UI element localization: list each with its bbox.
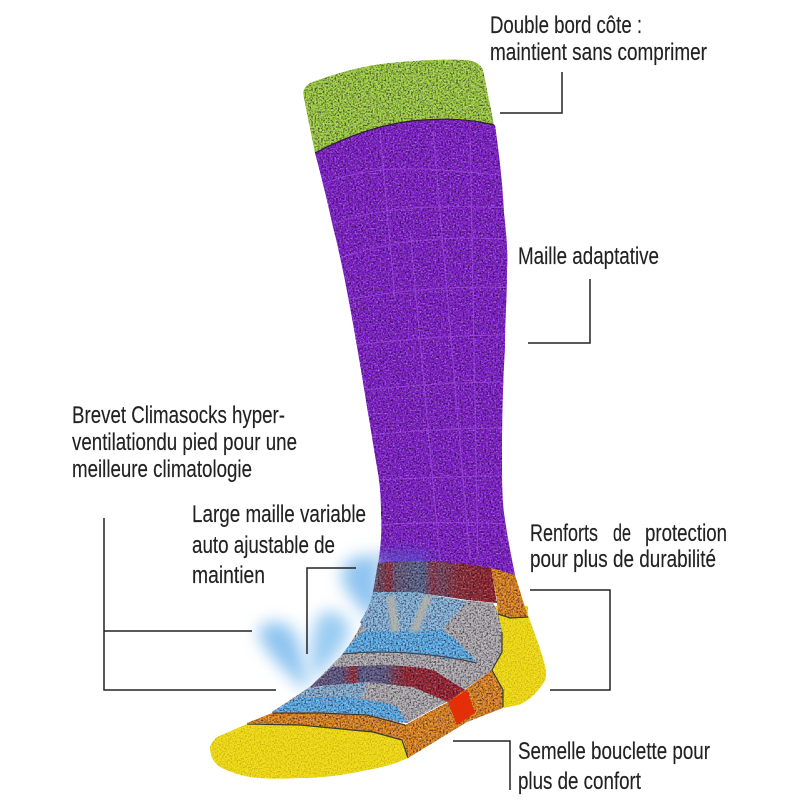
callout: large maille variable [192,501,366,654]
callout: renforts de protection: pour plus de durabilité [530,546,716,573]
callout: semelle bouclette: Semelle bouclette pour [518,738,710,765]
callout: brevet climasocks: Brevet Climasocks hyper- [72,402,285,429]
blue haze at ankle top [377,552,433,568]
callout: semelle bouclette: plus de confort [518,768,641,795]
sock illustration [210,60,546,779]
callout: brevet climasocks [72,402,297,690]
mid foot band [310,665,465,702]
seams [247,614,528,758]
bright blue upper mesh [343,630,477,662]
ventilation plume: ankle [341,556,380,618]
callout: renforts de protection [530,520,727,690]
yellow heel [493,606,546,708]
callout: renforts de protection: protection [645,520,727,547]
callout: large maille variable: Large maille variable [192,501,366,528]
callout: semelle bouclette [453,738,710,795]
cuff bottom shadow [315,119,494,153]
callout: maille adaptative [518,243,659,343]
lower blue mesh [272,697,407,723]
callout: large maille variable: maintien [192,562,265,589]
sock leg: purple adaptive knit [315,119,515,575]
knit grid lines [320,130,515,560]
ventilation plume: instep [311,611,350,682]
callout: renforts de protection: Renforts [530,520,598,547]
cuff: green double rib [303,60,494,153]
pale blue upper mesh [360,592,467,632]
callout: brevet climasocks: ventilationdu pied pour une [72,429,297,456]
callout: double bord côte: Double bord côte : [490,12,642,39]
callout: double bord côte [490,12,707,113]
callout: renforts de protection: de [613,520,631,547]
orange ankle protection [491,568,528,618]
ankle band [373,561,497,603]
callout: maille adaptative: Maille adaptative [518,243,659,270]
red reinforcement [448,690,475,725]
dark seam above mid band [343,652,477,663]
callout: brevet climasocks: meilleure climatologie [72,456,252,483]
pale blue toe mesh [272,682,367,712]
callout: double bord côte: maintient sans comprimer [490,39,707,66]
foot grey ventilation area [272,592,503,723]
yellow toe [210,724,408,779]
callout: large maille variable: auto ajustable de [192,532,335,559]
grey streaks in mesh [390,596,428,632]
ventilation plume: toe [258,622,307,692]
orange sole band [247,670,503,758]
